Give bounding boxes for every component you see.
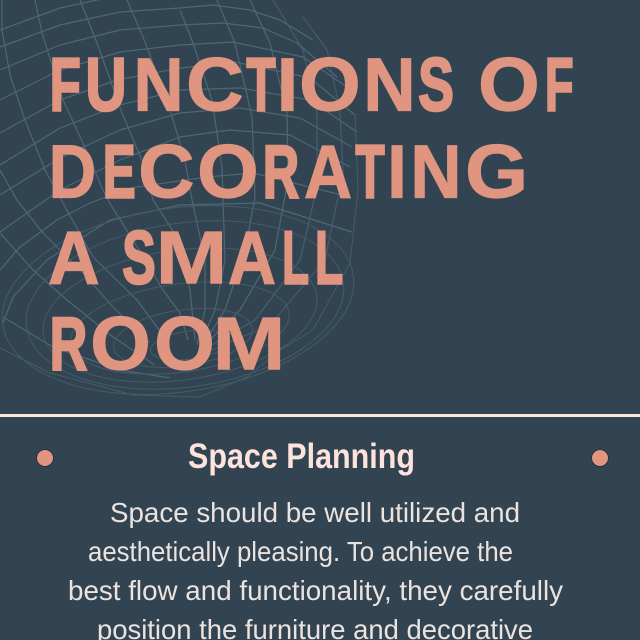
title: O [197,130,259,214]
title: O [154,302,215,386]
title: N [410,130,461,214]
title: E [103,130,136,214]
title: R [50,302,87,386]
body text: aesthetically pleasing. To achieve the [88,536,513,567]
body text [68,497,563,640]
title: N [134,42,183,126]
title: C [186,42,244,126]
title: T [356,130,385,214]
title: G [465,130,528,214]
body text: best flow and functionality, they carefully [68,575,563,606]
title: A [48,216,99,300]
title: T [246,42,276,126]
title: D [49,130,96,214]
title: A [228,216,276,300]
bullet dot right [592,450,608,466]
title: S [122,216,156,300]
bullet dot left [36,450,54,466]
title: I [277,42,298,126]
title: O [90,302,151,386]
title: A [304,130,352,214]
section: space planning [36,437,608,640]
title: M [212,302,286,386]
body text: Space should be well utilized and [110,497,520,528]
title: S [418,42,454,126]
title: I [387,130,407,214]
title: R [263,130,299,214]
icon: wireframe globe [0,0,366,416]
title [48,42,574,386]
divider line [0,414,640,417]
title: L [282,216,309,300]
title: C [138,130,194,214]
title: O [478,42,540,126]
section heading: Space Planning [188,437,415,476]
title: N [363,42,416,126]
title: U [86,42,126,126]
title: M [156,216,228,300]
title: F [545,42,574,126]
title: F [50,42,81,126]
title: O [299,42,361,126]
title: L [315,216,343,300]
